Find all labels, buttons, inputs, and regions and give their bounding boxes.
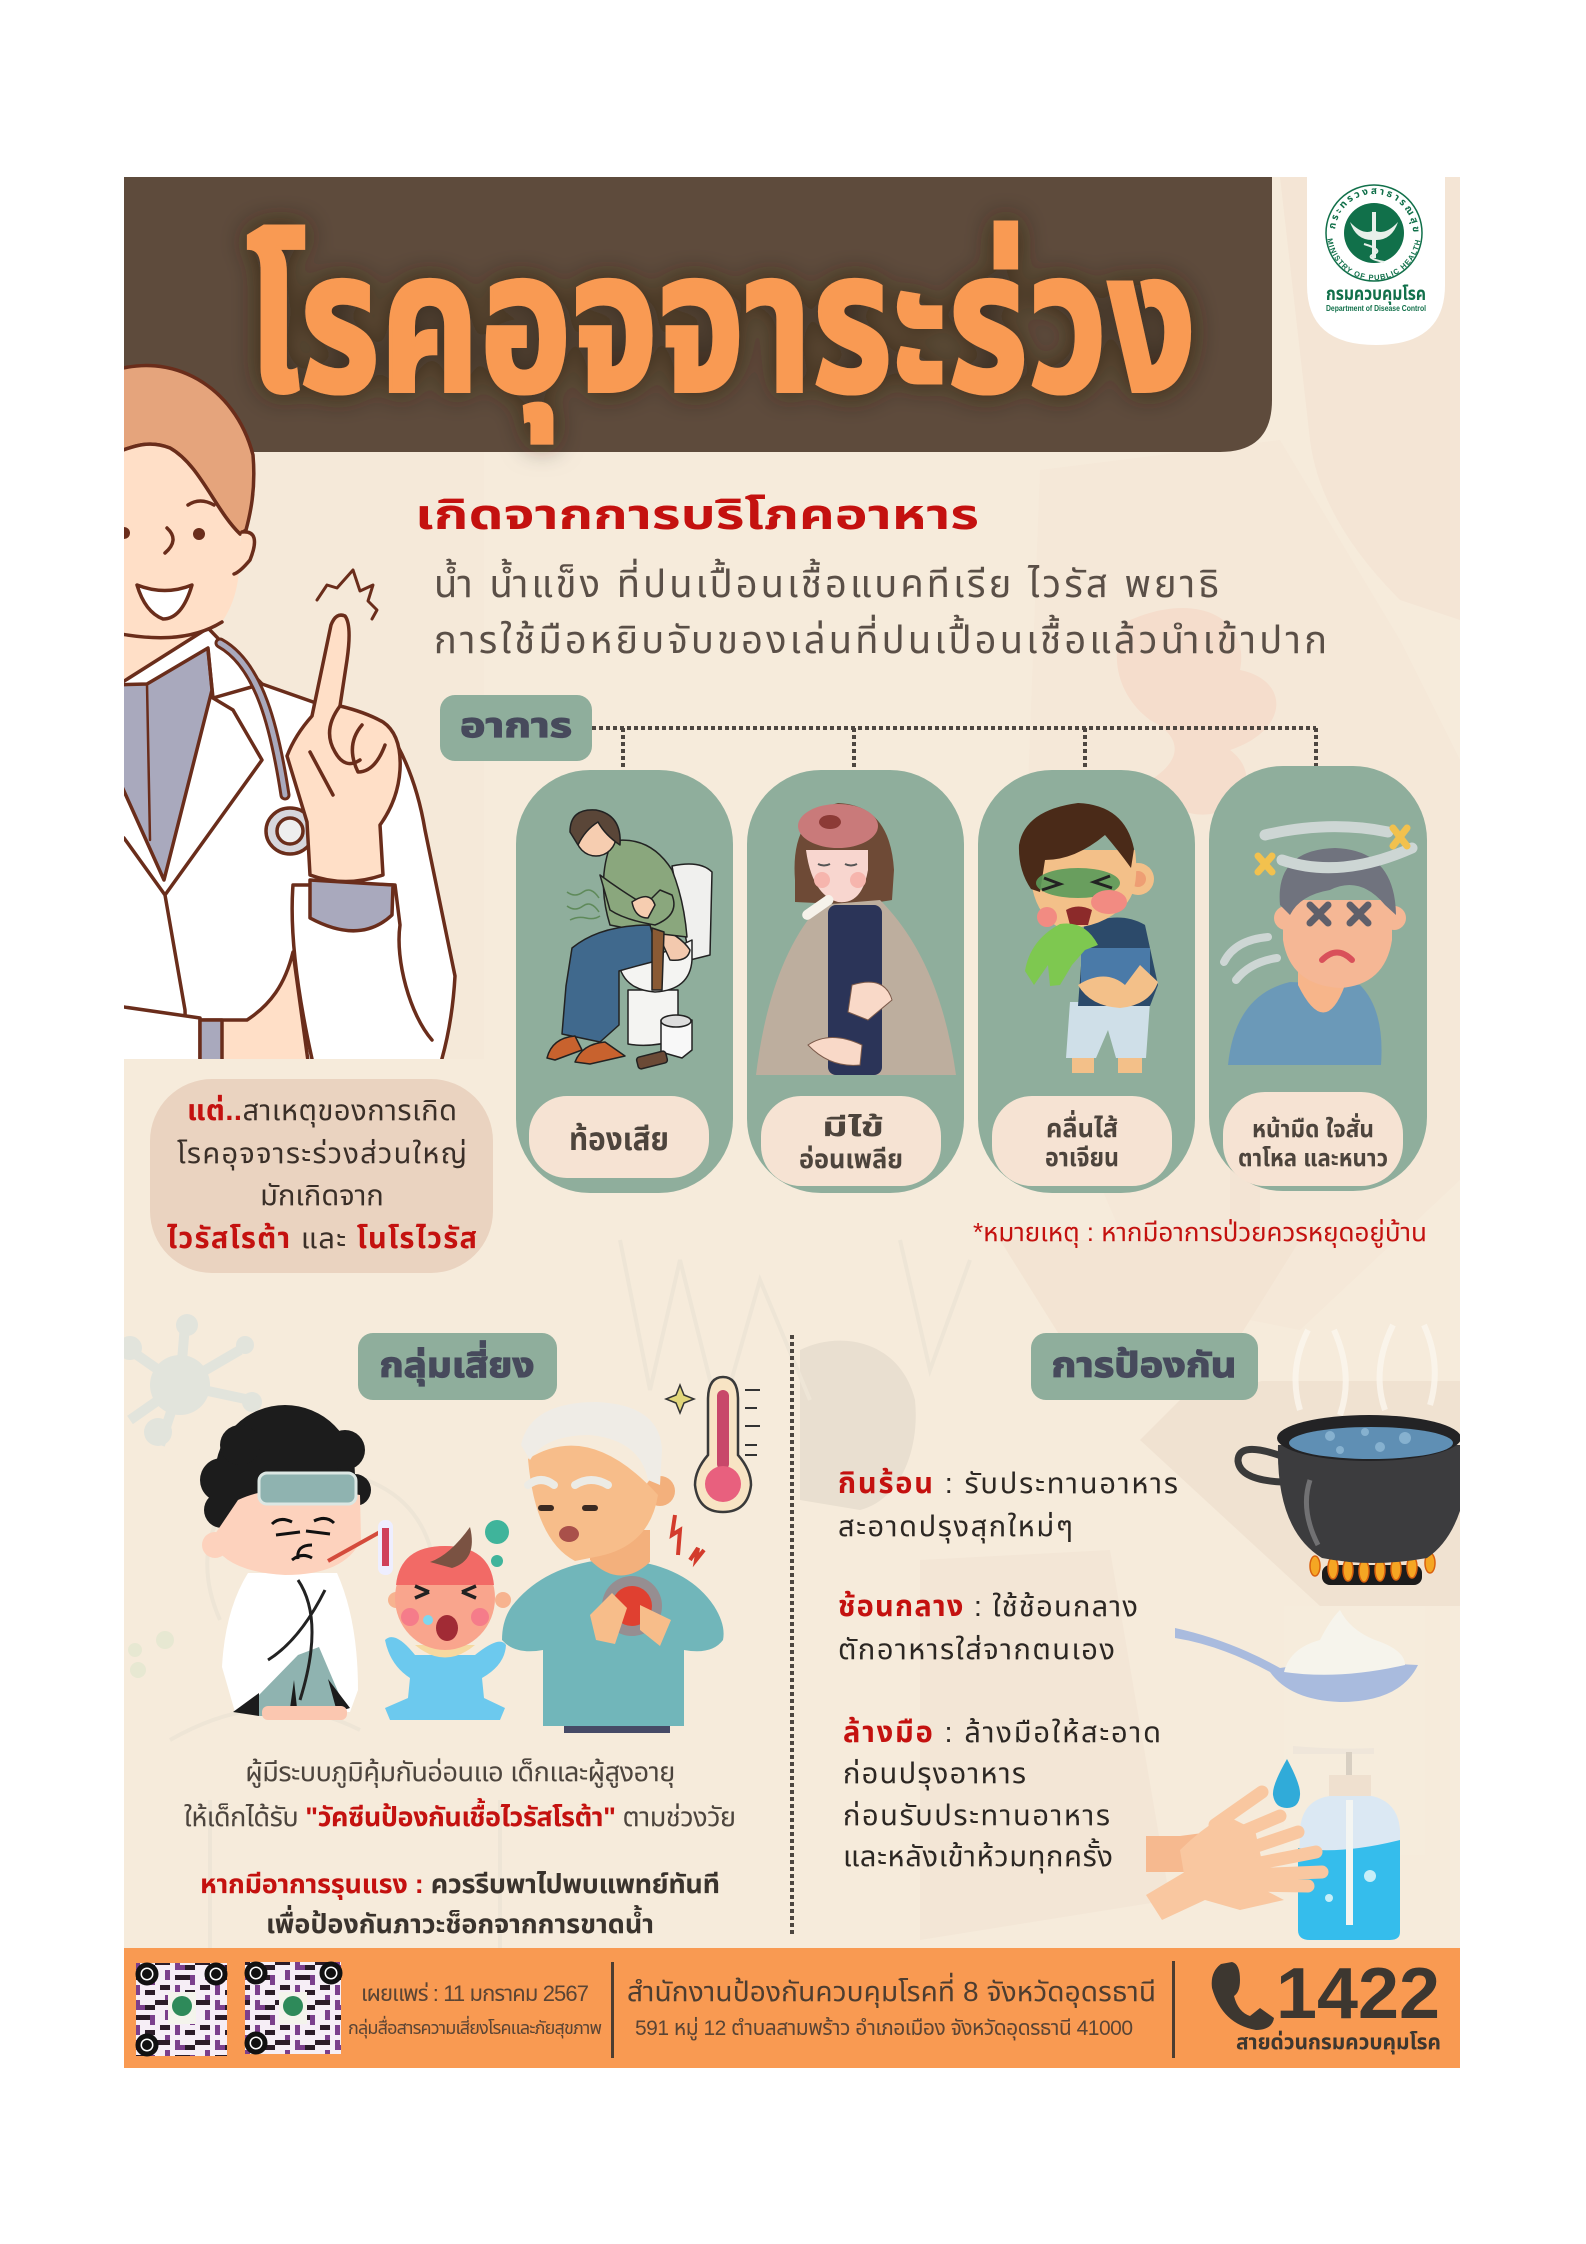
tag: symptoms: อาการ [460,707,572,745]
callout: main causes: แต่..สาเหตุของการเกิด [187,1095,457,1127]
header banner [124,177,1272,452]
illustration: crying baby [385,1520,511,1720]
logo: department of disease control: กระทรวงสาธารณสุข [1330,188,1419,232]
icon: boiling pot [1238,1415,1470,1585]
tag: prevention [1031,1333,1258,1400]
icon: spoon with cream [1175,1610,1418,1702]
tag: risk groups: กลุ่มเสี่ยง [380,1340,534,1386]
office name and address: สำนักงานป้องกันควบคุมโรคที่ 8 จังหวัดอุดรธานี [627,1972,1156,2008]
qr code 2 [245,1962,341,2054]
title: โรคอุจจาระร่วง [246,212,1196,443]
panel: poster background [118,177,1460,2068]
connector: dotted lines to symptom cards [592,728,1316,770]
risk group text [184,1757,736,1832]
risk group text: ให้เด็กได้รับ "วัคซีนป้องกันเชื้อไวรัสโรต้า" ตามช่วงวัย [184,1798,736,1832]
hotline number: 1422 [1276,1954,1440,2034]
label pill: มีไข้ [822,1112,884,1142]
label pill: อาเจียน [1045,1142,1119,1172]
office name and address [627,1972,1156,2041]
icon: boy vomiting [1019,803,1158,1073]
prevention text: wash hands: ก่อนรับประทานอาหาร [843,1800,1110,1832]
label pill: หน้ามืด ใจสั่น [1252,1113,1374,1143]
prevention text: wash hands: ล้างมือ : ล้างมือให้สะอาด [843,1717,1161,1749]
logo: department of disease control: MINISTRY OF PUBLIC HEALTH [1327,238,1420,280]
label pill [761,1096,941,1186]
panel: symptom diarrhea [516,770,733,1193]
severe symptoms warning: เพื่อป้องกันภาวะช็อกจากการขาดน้ำ [266,1905,654,1939]
icon: woman with fever [756,803,956,1075]
label pill: อ่อนเพลีย [799,1144,903,1174]
risk group text: ผู้มีระบบภูมิคุ้มกันอ่อนแอ เด็กและผู้สูงอายุ [245,1757,675,1788]
tag: prevention: การป้องกัน [1052,1346,1236,1385]
icon: man on toilet [547,810,712,1069]
footer bar [124,1948,1460,2068]
hotline label: สายด่วนกรมควบคุมโรค [1236,2031,1441,2055]
office name and address: 591 หมู่ 12 ตำบลสามพร้าว อำเภอเมือง จังหวัดอุดรธานี 41000 [635,2016,1133,2041]
qr code 1 [136,1963,227,2056]
label pill: ตาโหล และหนาว [1238,1145,1388,1172]
logo: department of disease control: Department of Disease Control [1326,304,1426,313]
publish date: กลุ่มสื่อสารความเสี่ยงโรคและภัยสุขภาพ [348,2015,602,2039]
note: *หมายเหตุ : หากมีอาการป่วยควรหยุดอยู่บ้าน [973,1217,1427,1248]
label pill [1223,1092,1403,1186]
callout: main causes: ไวรัสโรต้า และ โนโรไวรัส [167,1223,477,1255]
tag: symptoms [440,695,592,761]
prevention text: wash hands [843,1717,1161,1873]
callout: main causes [150,1079,493,1273]
icon: dizzy man [1224,827,1412,1065]
illustration: elderly man with chest pain [502,1402,724,1733]
icon: telephone [1212,1962,1274,2030]
intro text: การใช้มือหยิบจับของเล่นที่ปนเปื้อนเชื้อแล้วนำเข้าปาก [434,614,1327,662]
label pill: คลื่นไส้ [1046,1110,1118,1143]
prevention text: serving spoon: ช้อนกลาง : ใช้ช้อนกลาง [838,1591,1138,1623]
label pill [529,1096,709,1178]
prevention text: eat hot: กินร้อน : รับประทานอาหาร [838,1468,1178,1500]
severe symptoms warning [200,1869,720,1939]
label pill [992,1096,1172,1186]
prevention text: serving spoon [838,1591,1138,1666]
prevention text: wash hands: ก่อนปรุงอาหาร [843,1758,1026,1790]
publish date: เผยแพร่ : 11 มกราคม 2567 [361,1981,589,2006]
center dotted divider [790,1335,794,1935]
illustration: doctor pointing [110,365,455,1090]
logo: department of disease control [1307,177,1445,345]
intro heading: เกิดจากการบริโภคอาหาร [415,491,979,538]
icon: hands and soap bottle [1146,1746,1400,1940]
prevention text: wash hands: และหลังเข้าห้วมทุกครั้ง [843,1838,1113,1873]
callout: main causes: มักเกิดจาก [260,1180,384,1212]
logo: department of disease control: กรมควบคุมโรค [1326,284,1426,305]
tag: risk groups [358,1333,557,1400]
panel: symptom dizziness [1209,766,1427,1191]
prevention text: serving spoon: ตักอาหารใส่จากตนเอง [838,1634,1115,1666]
icon: thermometer [666,1377,760,1512]
panel: symptom nausea [978,770,1195,1193]
label pill: ท้องเสีย [569,1121,669,1157]
intro text [434,558,1327,662]
panel: symptom fever [747,770,964,1193]
intro text: น้ำ น้ำแข็ง ที่ปนเปื้อนเชื้อแบคทีเรีย ไวรัส พยาธิ [434,558,1219,606]
publish date [348,1981,602,2039]
prevention text: eat hot [838,1468,1178,1543]
severe symptoms warning: หากมีอาการรุนแรง : ควรรีบพาไปพบแพทย์ทันที [200,1869,720,1900]
callout: main causes: โรคอุจจาระร่วงส่วนใหญ่ [177,1138,467,1170]
illustration: sick child in blanket [200,1405,393,1720]
prevention text: eat hot: สะอาดปรุงสุกใหม่ๆ [838,1511,1073,1543]
